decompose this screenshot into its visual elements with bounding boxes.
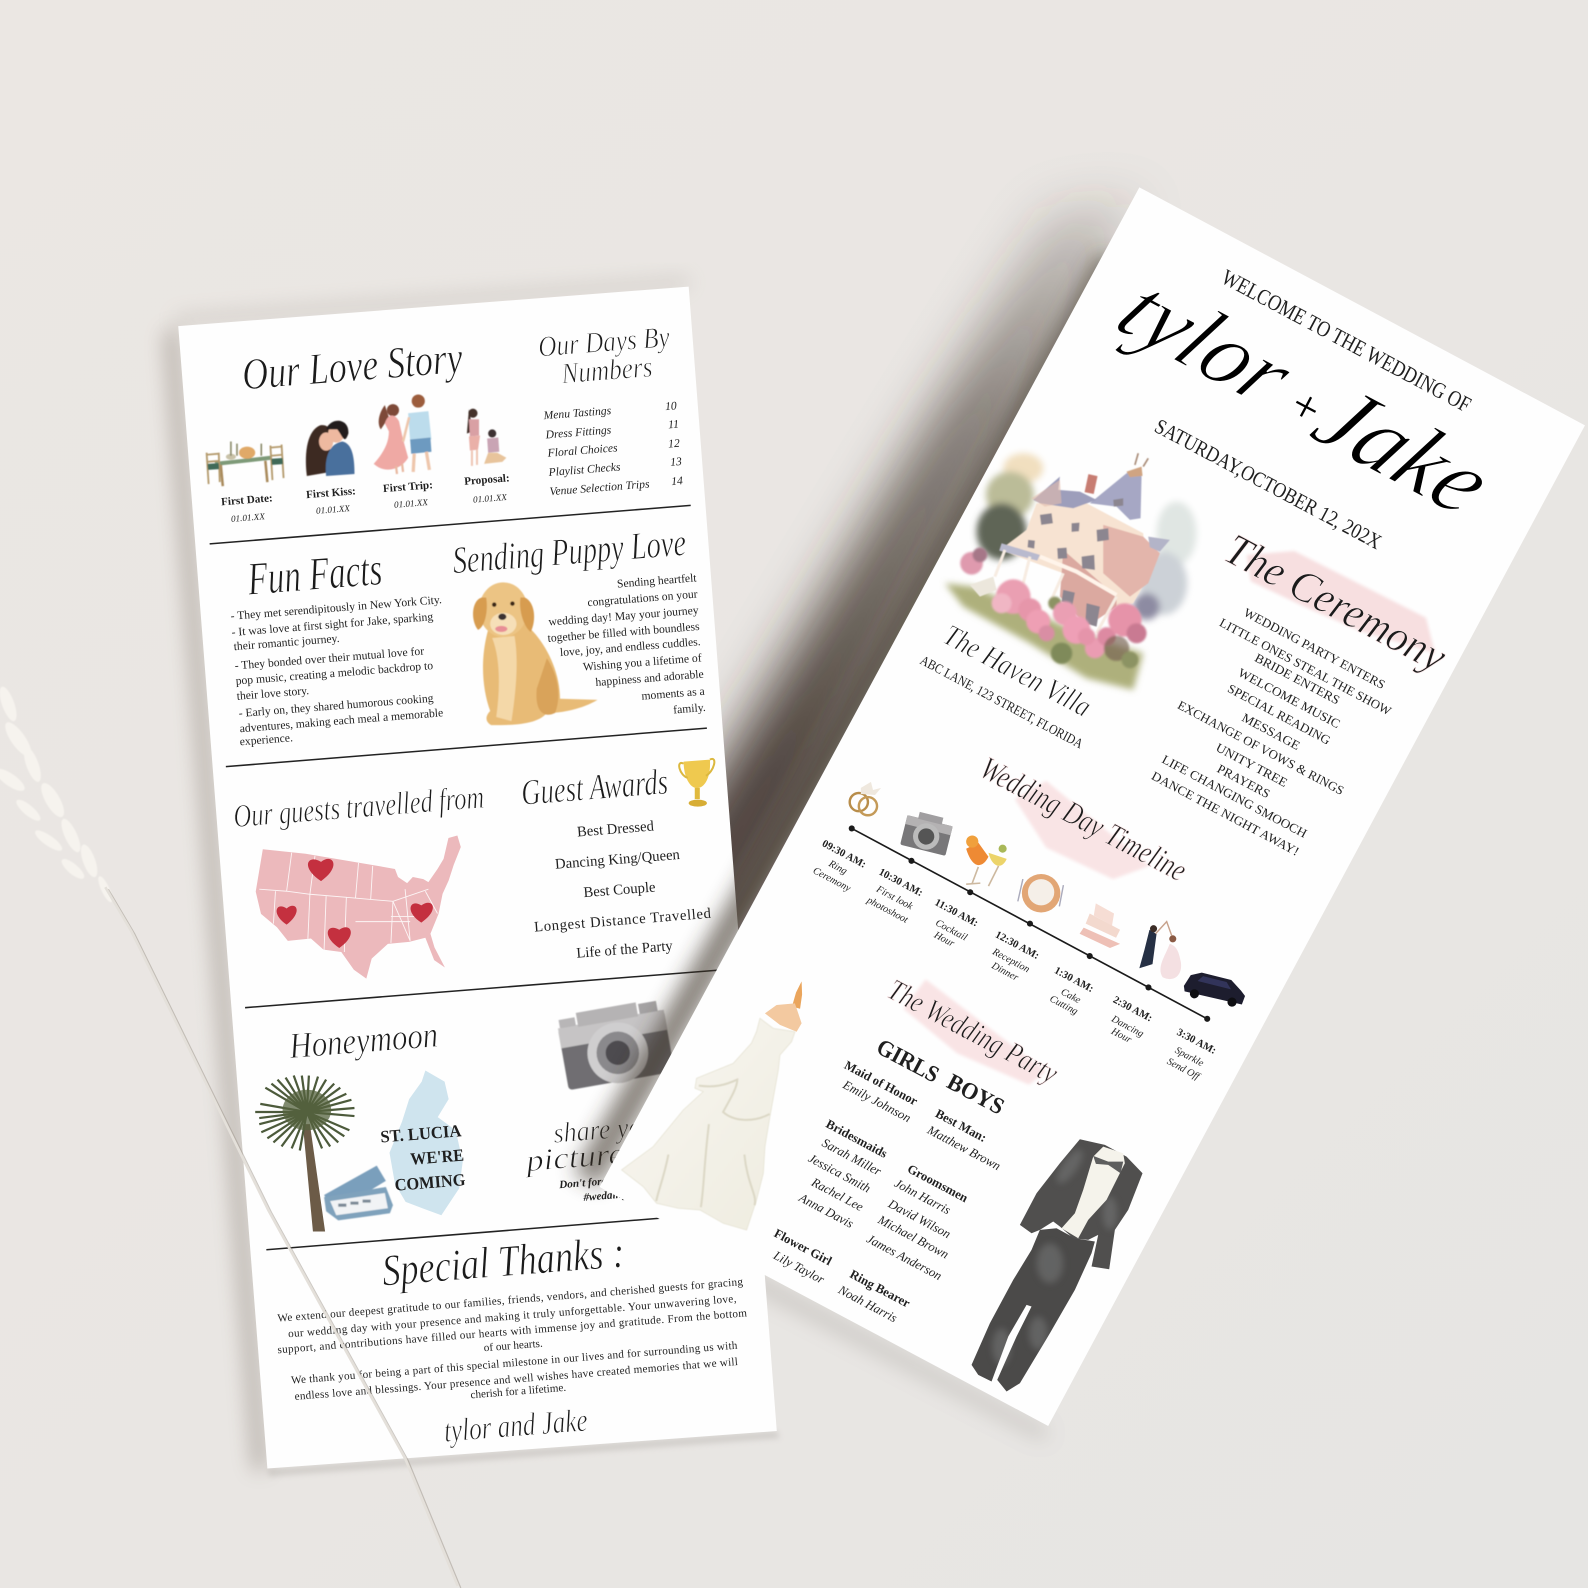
text: share your pictures: share your: [552, 1110, 667, 1150]
timeline label: 12:30: Reception: [990, 946, 1031, 975]
wheat stem: [105, 887, 461, 1588]
list: bridesmaids: Sarah Miller: [820, 1136, 884, 1179]
list: guest awards: Life of the Party: [576, 938, 674, 962]
caption: proposal: Proposal:: [464, 472, 510, 488]
caption: first date: First Date:: [221, 492, 273, 508]
tuxedo: jacket: [1020, 1139, 1143, 1269]
list: guest awards: Dancing King/Queen: [554, 847, 681, 873]
heading: welcome line: WELCOME TO THE WEDDING OF: [1218, 264, 1475, 417]
list: days by numbers: 11: [668, 418, 679, 431]
list: ceremony program: LIFE CHANGING SMOOCH: [1160, 752, 1309, 841]
list: ceremony program: LITTLE ONES STEAL THE SHOW: [1217, 616, 1394, 718]
heading: Honeymoon: Honeymoon: [287, 1015, 439, 1066]
list: maid of honor: Maid of Honor: [842, 1058, 920, 1108]
list: days by numbers: Menu Tastings: [542, 404, 612, 422]
illustration: palm tree: [255, 1076, 354, 1232]
list: ceremony program: WEDDING PARTY ENTERS: [1241, 605, 1387, 692]
heading: The Ceremony: The Ceremony: [1217, 523, 1455, 682]
list: ceremony program: BRIDE ENTERS: [1252, 651, 1342, 707]
panel: left card: [178, 287, 777, 1468]
illustration: Victorian villa: [945, 453, 1197, 690]
text block: puppy love: Wishing you a lifetime of: [582, 651, 702, 674]
illustration: dinner table: [207, 442, 284, 486]
title: tylor + Jake: +: [1279, 377, 1331, 437]
timeline label: 11:30: Hour: [931, 929, 956, 950]
timeline label: 1:30: Cutting: [1048, 994, 1080, 1017]
illustration: wedding dress: [622, 981, 802, 1230]
timeline label: 10:30: First look: [873, 884, 915, 913]
list: ceremony program: WELCOME MUSIC: [1236, 666, 1342, 731]
list: ceremony program: DANCE THE NIGHT AWAY!: [1149, 769, 1301, 859]
icon: rings: [850, 782, 881, 815]
illustration: golden retriever puppy: [473, 582, 598, 725]
heading: GIRLS and BOYS: BOYS: [943, 1069, 1008, 1120]
list: ceremony program: MESSAGE: [1239, 711, 1303, 753]
timeline label: 1:30: [1048, 965, 1095, 1017]
list: ring bearer: Noah Harris: [835, 1282, 900, 1325]
list: guest awards: Longest Distance Travelled: [534, 906, 712, 936]
timeline label: 11:30: 11:30 AM:: [933, 897, 980, 929]
text: share your pictures: [522, 1110, 667, 1204]
title: tylor + Jake: tylor: [1098, 260, 1315, 424]
list: groomsmen: [864, 1162, 970, 1283]
heading: Our Love Story: Our Love Story: [240, 332, 464, 399]
list: groomsmen: Groomsmen: [905, 1162, 970, 1205]
list: ceremony program: SPECIAL READING: [1225, 681, 1333, 748]
caption: first date: [221, 492, 273, 524]
timeline label: 11:30: Cocktail: [933, 918, 969, 944]
tuxedo: trousers: [972, 1228, 1095, 1392]
text block: puppy love: love, joy, and endless cuddles.: [559, 635, 701, 659]
text block: fun facts: their romantic journey.: [233, 632, 340, 653]
text block: special thanks: our wedding day with your presence and making it truly unforgettable. Your unwavering love,: [288, 1293, 737, 1340]
list: bridesmaids: Rachel Lee: [808, 1175, 866, 1214]
caption: first trip: 01.01.XX: [394, 497, 429, 510]
list: bridesmaids: [796, 1117, 890, 1231]
text block: fun facts: pop music, creating a melodic backdrop to: [235, 659, 434, 688]
list: ceremony program: PRAYERS: [1215, 762, 1272, 801]
text block: fun facts: their love story.: [236, 684, 310, 703]
title: tylor + Jake: Jake: [1293, 367, 1514, 534]
text block: fun facts: - Early on, they shared humorous cooking: [238, 692, 434, 720]
illustration: tuxedo: [972, 1139, 1143, 1392]
text block: puppy love: [547, 571, 706, 716]
text block: special thanks: We thank you for being a part of this special milestone in our lives and for surrounding us with: [291, 1340, 738, 1387]
text block: fun facts: - They met serendipitously in New York City.: [230, 593, 442, 623]
text block: fun facts: adventures, making each meal a memorable: [239, 706, 444, 735]
timeline label: 09:30: Ring: [826, 858, 849, 877]
brush: wedding party: [903, 979, 1046, 1085]
timeline label: 2:30: 2:30 AM:: [1111, 995, 1154, 1024]
caption: proposal: 01.01.XX: [473, 492, 508, 505]
caption: first trip: First Trip:: [383, 479, 433, 495]
text block: puppy love: Sending heartfelt: [616, 571, 698, 591]
timeline label: 11:30: [931, 897, 980, 950]
heading: Sending Puppy Love: Sending Puppy Love: [451, 522, 687, 582]
timeline label: 2:30: Dancing: [1109, 1013, 1145, 1040]
heading: Special Thanks: Special Thanks :: [380, 1227, 626, 1296]
list: days by numbers: [542, 399, 683, 498]
timeline label: 09:30: 09:30 AM:: [820, 838, 868, 871]
list: guest awards: [534, 818, 712, 962]
label: St Lucia we're coming: [380, 1121, 466, 1195]
illustration: couple walking: [374, 394, 431, 474]
text block: special thanks: We extend our deepest gratitude to our families, friends, vendors, and cherished guests for gracing: [277, 1276, 744, 1325]
list: ceremony program: UNITY TREE: [1213, 740, 1290, 790]
date line: SATURDAY,OCTOBER 12, 202X: [1151, 414, 1386, 554]
caption: first kiss: [306, 485, 356, 516]
heading: Fun Facts: Fun Facts: [245, 543, 384, 606]
text block: puppy love: wedding day! May your journey: [548, 604, 699, 629]
brush: timeline: [1015, 781, 1149, 879]
list: days by numbers: 10: [665, 399, 677, 413]
heading: Guest Awards: Guest Awards: [520, 761, 669, 813]
text block: puppy love: congratulations on your: [587, 588, 698, 609]
heading: Our Days By Numbers: Numbers: [559, 351, 654, 390]
villa: flower beds: [960, 548, 1147, 668]
tuxedo: bow tie: [1093, 1156, 1123, 1173]
list: ring bearer: Ring Bearer: [847, 1267, 913, 1311]
label: St Lucia we're coming: ST. LUCIA: [380, 1121, 463, 1147]
chart: timeline line with dots: [849, 825, 1210, 1022]
tuxedo: shirt: [1062, 1147, 1125, 1238]
wheat plume: [0, 685, 115, 904]
text: share your pictures: #wedding: [582, 1188, 628, 1204]
venue address: ABC LANE, 123 STREET, FLORIDA: [918, 653, 1086, 751]
map: US guest origins: [256, 836, 461, 979]
heading: Our guests travelled from: Our guests travelled from: [232, 780, 485, 835]
brush: ceremony: [1247, 551, 1435, 653]
villa: garden backdrop: [945, 453, 1197, 690]
text block: special thanks: of our hearts.: [483, 1338, 543, 1354]
heading: GIRLS and BOYS: GIRLS: [872, 1034, 943, 1088]
list: flower girl: [770, 1226, 835, 1287]
icon: camera: [900, 809, 954, 856]
caption: first kiss: 01.01.XX: [316, 503, 351, 516]
timeline label: 09:30: Ceremony: [811, 865, 853, 895]
heading: Our Days By Numbers: Our Days By: [537, 321, 672, 364]
illustration: proposal: [467, 409, 506, 466]
timeline label: 3:30: Send Off: [1165, 1056, 1202, 1083]
illustration: boarding tickets: [324, 1166, 393, 1220]
icon: limousine: [1182, 969, 1248, 1010]
text block: fun facts: - It was love at first sight for Jake, sparking: [231, 610, 434, 639]
timeline label: 1:30: Cake: [1059, 987, 1083, 1006]
list: days by numbers: Venue Selection Trips: [549, 477, 650, 498]
list: guest awards: Best Couple: [583, 879, 656, 901]
caption: first date: 01.01.XX: [231, 511, 266, 524]
caption: first trip: [383, 479, 433, 510]
text block: special thanks: support, and contributions have filled our hearts with immense joy and gratitude. From the bottom: [277, 1307, 748, 1356]
timeline label: 2:30: Hour: [1108, 1026, 1133, 1046]
illustration: vintage camera: [556, 998, 675, 1092]
timeline label: 3:30: [1165, 1027, 1218, 1083]
panel: right card: [600, 187, 1585, 1426]
timeline label: 12:30: [989, 930, 1041, 984]
list: ceremony program: EXCHANGE OF VOWS & RINGS: [1175, 698, 1346, 798]
heading: Our Days By Numbers: [537, 321, 672, 390]
illustration: first kiss couple: [306, 421, 354, 476]
title: tylor + Jake: [1098, 260, 1514, 534]
icon: plate setting: [1018, 874, 1063, 912]
text block: puppy love: moments as a: [641, 685, 705, 703]
icon: trophy: [679, 759, 714, 807]
text: share your pictures: pictures: [522, 1135, 638, 1178]
shadow of the left card: [164, 277, 780, 1477]
timeline label: 12:30: 12:30 AM:: [993, 930, 1041, 962]
text block: fun facts: experience.: [239, 731, 293, 748]
text block: puppy love: happiness and adorable: [595, 668, 704, 689]
text block: puppy love: together be filled with boundless: [547, 620, 701, 645]
icon: dancing couple: [1139, 922, 1181, 979]
list: ring bearer: [835, 1267, 913, 1325]
map: St Lucia island: [390, 1070, 463, 1215]
text block: fun facts: - They bonded over their mutual love for: [234, 645, 425, 672]
text block: special thanks: cherish for a lifetime.: [470, 1382, 567, 1401]
list: days by numbers: Dress Fittings: [544, 423, 612, 442]
timeline label: 10:30: 10:30 AM:: [877, 867, 924, 899]
label: St Lucia we're coming: WE'RE: [410, 1146, 465, 1169]
heading: The Wedding Party: The Wedding Party: [882, 972, 1064, 1090]
list: flower girl: Lily Taylor: [770, 1248, 827, 1287]
list: maid of honor: Emily Johnson: [840, 1077, 913, 1125]
list: groomsmen: John Harris: [892, 1176, 953, 1217]
label: St Lucia we're coming: COMING: [394, 1170, 466, 1195]
timeline label: 09:30: [811, 838, 868, 895]
list: guest awards: Best Dressed: [576, 818, 655, 841]
icon: hearts on map: [277, 859, 433, 948]
list: bridesmaids: Anna Davis: [796, 1190, 856, 1231]
list: days by numbers: 14: [671, 474, 683, 488]
list: bridesmaids: Jessica Smith: [806, 1151, 873, 1196]
timeline label: 1:30: 1:30 AM:: [1052, 965, 1095, 995]
list: groomsmen: Michael Brown: [875, 1212, 951, 1262]
heading: The Haven Villa: The Haven Villa: [938, 618, 1097, 724]
list: flower girl: Flower Girl: [772, 1226, 835, 1268]
heading: GIRLS and BOYS: [872, 1034, 1008, 1120]
text block: special thanks: [277, 1276, 748, 1403]
text block: fun facts: [230, 593, 444, 748]
list: ceremony program: [1149, 605, 1394, 859]
timeline label: 2:30: [1108, 995, 1154, 1046]
signature: tylor and Jake: tylor and Jake: [443, 1403, 589, 1450]
list: groomsmen: David Wilson: [885, 1196, 953, 1241]
timeline label: 12:30: Dinner: [989, 960, 1020, 984]
icon: wedding cake: [1080, 903, 1120, 948]
caption: first kiss: First Kiss:: [306, 485, 356, 501]
list: days by numbers: 12: [668, 437, 680, 451]
list: best man: Matthew Brown: [924, 1122, 1003, 1173]
caption: proposal: [464, 472, 510, 505]
list: best man: Best Man:: [933, 1106, 989, 1145]
shadow cast along right card edge: [573, 253, 1124, 1187]
timeline label: 3:30: Sparkle: [1173, 1045, 1206, 1069]
list: bridesmaids: Bridesmaids: [824, 1117, 890, 1161]
timeline label: 3:30: 3:30 AM:: [1175, 1027, 1218, 1057]
shadow of the right card: [496, 203, 1139, 1440]
text block: puppy love: family.: [673, 701, 706, 716]
icon: cocktails: [966, 836, 1007, 886]
list: days by numbers: Floral Choices: [546, 441, 618, 460]
text block: special thanks: endless love and blessings. Your presence and well wishes have created memories that we will: [294, 1356, 738, 1403]
list: groomsmen: James Anderson: [864, 1232, 944, 1283]
timeline label: 10:30: photoshoot: [864, 894, 911, 926]
text: share your pictures: Don't forget to tag: [558, 1173, 644, 1191]
heading: Wedding Day Timeline: Wedding Day Timeline: [974, 750, 1192, 889]
list: days by numbers: 13: [670, 455, 682, 469]
villa: house: [970, 453, 1170, 633]
timeline label: 10:30: [864, 867, 924, 926]
list: days by numbers: Playlist Checks: [547, 460, 621, 479]
